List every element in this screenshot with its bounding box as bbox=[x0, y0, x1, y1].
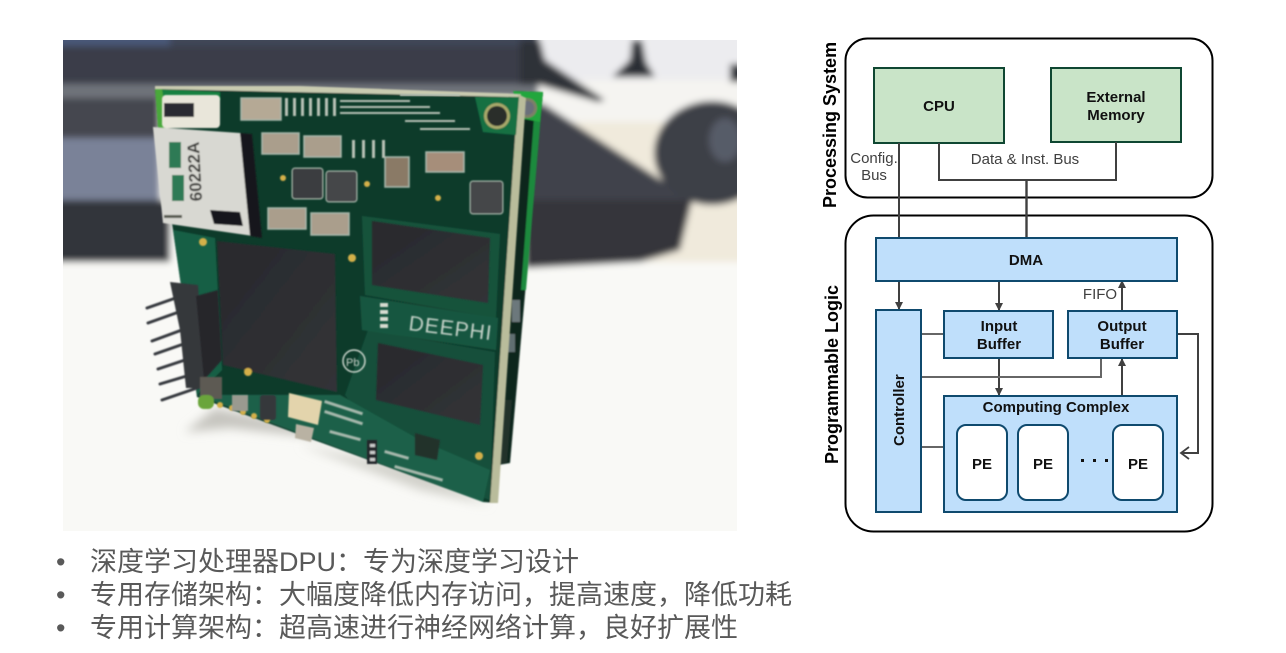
pin header bbox=[147, 282, 222, 409]
CPU block bbox=[874, 68, 1004, 143]
bullet 2: • bbox=[56, 580, 65, 610]
Pb-free mark bbox=[343, 350, 365, 372]
lower-left board details bbox=[232, 395, 377, 464]
PE 1 bbox=[957, 425, 1007, 500]
External Memory block: Memory bbox=[1087, 107, 1145, 124]
small IC U22 bbox=[415, 433, 440, 460]
CPU block: CPU bbox=[923, 98, 955, 115]
bullet 3: 专用计算架构：超高速进行神经网络计算，良好扩展性 bbox=[90, 613, 738, 643]
PE 2: PE bbox=[1033, 456, 1053, 473]
bullet 1: 深度学习处理器DPU：专为深度学习设计 bbox=[90, 547, 579, 577]
Output Buffer block: Buffer bbox=[1100, 336, 1144, 353]
pin shadows bbox=[185, 408, 340, 440]
DMA block bbox=[876, 238, 1177, 281]
memory chip U1 bbox=[372, 221, 490, 303]
label: Programmable Logic: Programmable Logic bbox=[822, 285, 842, 464]
SD card slot bbox=[153, 127, 262, 238]
main processor chip bbox=[217, 241, 337, 392]
SD card slot: 60222A bbox=[184, 141, 206, 202]
push button bbox=[162, 95, 220, 128]
gold test pads bbox=[199, 175, 483, 460]
bullet list bbox=[56, 547, 792, 643]
Data and Inst Bus label: Data & Inst. Bus bbox=[971, 151, 1079, 168]
desk and laptop background bbox=[40, 20, 770, 550]
crystal oscillator bbox=[288, 393, 322, 425]
Output Buffer block bbox=[1068, 311, 1177, 358]
External Memory block: External bbox=[1086, 89, 1146, 106]
PE 2 bbox=[1018, 425, 1068, 500]
Config Bus label: Bus bbox=[861, 167, 887, 184]
inductors bbox=[292, 168, 503, 214]
DMA block: DMA bbox=[1009, 252, 1043, 269]
RP3 resistor block bbox=[380, 303, 388, 328]
PE 3: PE bbox=[1128, 456, 1148, 473]
panel: Programmable Logic bbox=[846, 216, 1212, 532]
bus connectors bbox=[899, 142, 1198, 453]
Input Buffer block: Input bbox=[981, 318, 1017, 335]
Config Bus label: Config. bbox=[850, 150, 898, 167]
Computing Complex block: Computing Complex bbox=[983, 399, 1130, 416]
panel: Processing System bbox=[846, 38, 1212, 198]
board: main green PCB bbox=[155, 86, 526, 503]
memory chip U2 bbox=[376, 343, 483, 425]
DEEPHI silkscreen: DEEPHI bbox=[407, 312, 494, 345]
board: components bbox=[147, 94, 503, 482]
Controller block bbox=[876, 310, 921, 512]
Output Buffer block: Output bbox=[1097, 318, 1147, 335]
capacitors bbox=[241, 98, 464, 235]
PE 3 bbox=[1113, 425, 1163, 500]
bullet 1: • bbox=[56, 547, 65, 577]
label: Processing System: Processing System bbox=[820, 42, 840, 208]
Computing Complex block bbox=[944, 396, 1177, 512]
Pb-free mark: Pb bbox=[346, 357, 359, 369]
board: rear board bbox=[497, 91, 543, 465]
Input Buffer block: Buffer bbox=[977, 336, 1021, 353]
photo: DPU circuit board on a desk bbox=[63, 40, 737, 531]
Controller block: Controller bbox=[891, 374, 908, 446]
pad rows bbox=[285, 94, 470, 158]
Input Buffer block bbox=[944, 311, 1053, 358]
bullet 2: 专用存储架构：大幅度降低内存访问，提高速度，降低功耗 bbox=[90, 580, 792, 610]
FIFO label: FIFO bbox=[1083, 286, 1117, 303]
PE 1: PE bbox=[972, 456, 992, 473]
External Memory block bbox=[1051, 68, 1181, 142]
lower capacitor bbox=[295, 424, 314, 442]
ellipsis dots bbox=[1081, 459, 1108, 462]
bullet 3: • bbox=[56, 613, 65, 643]
